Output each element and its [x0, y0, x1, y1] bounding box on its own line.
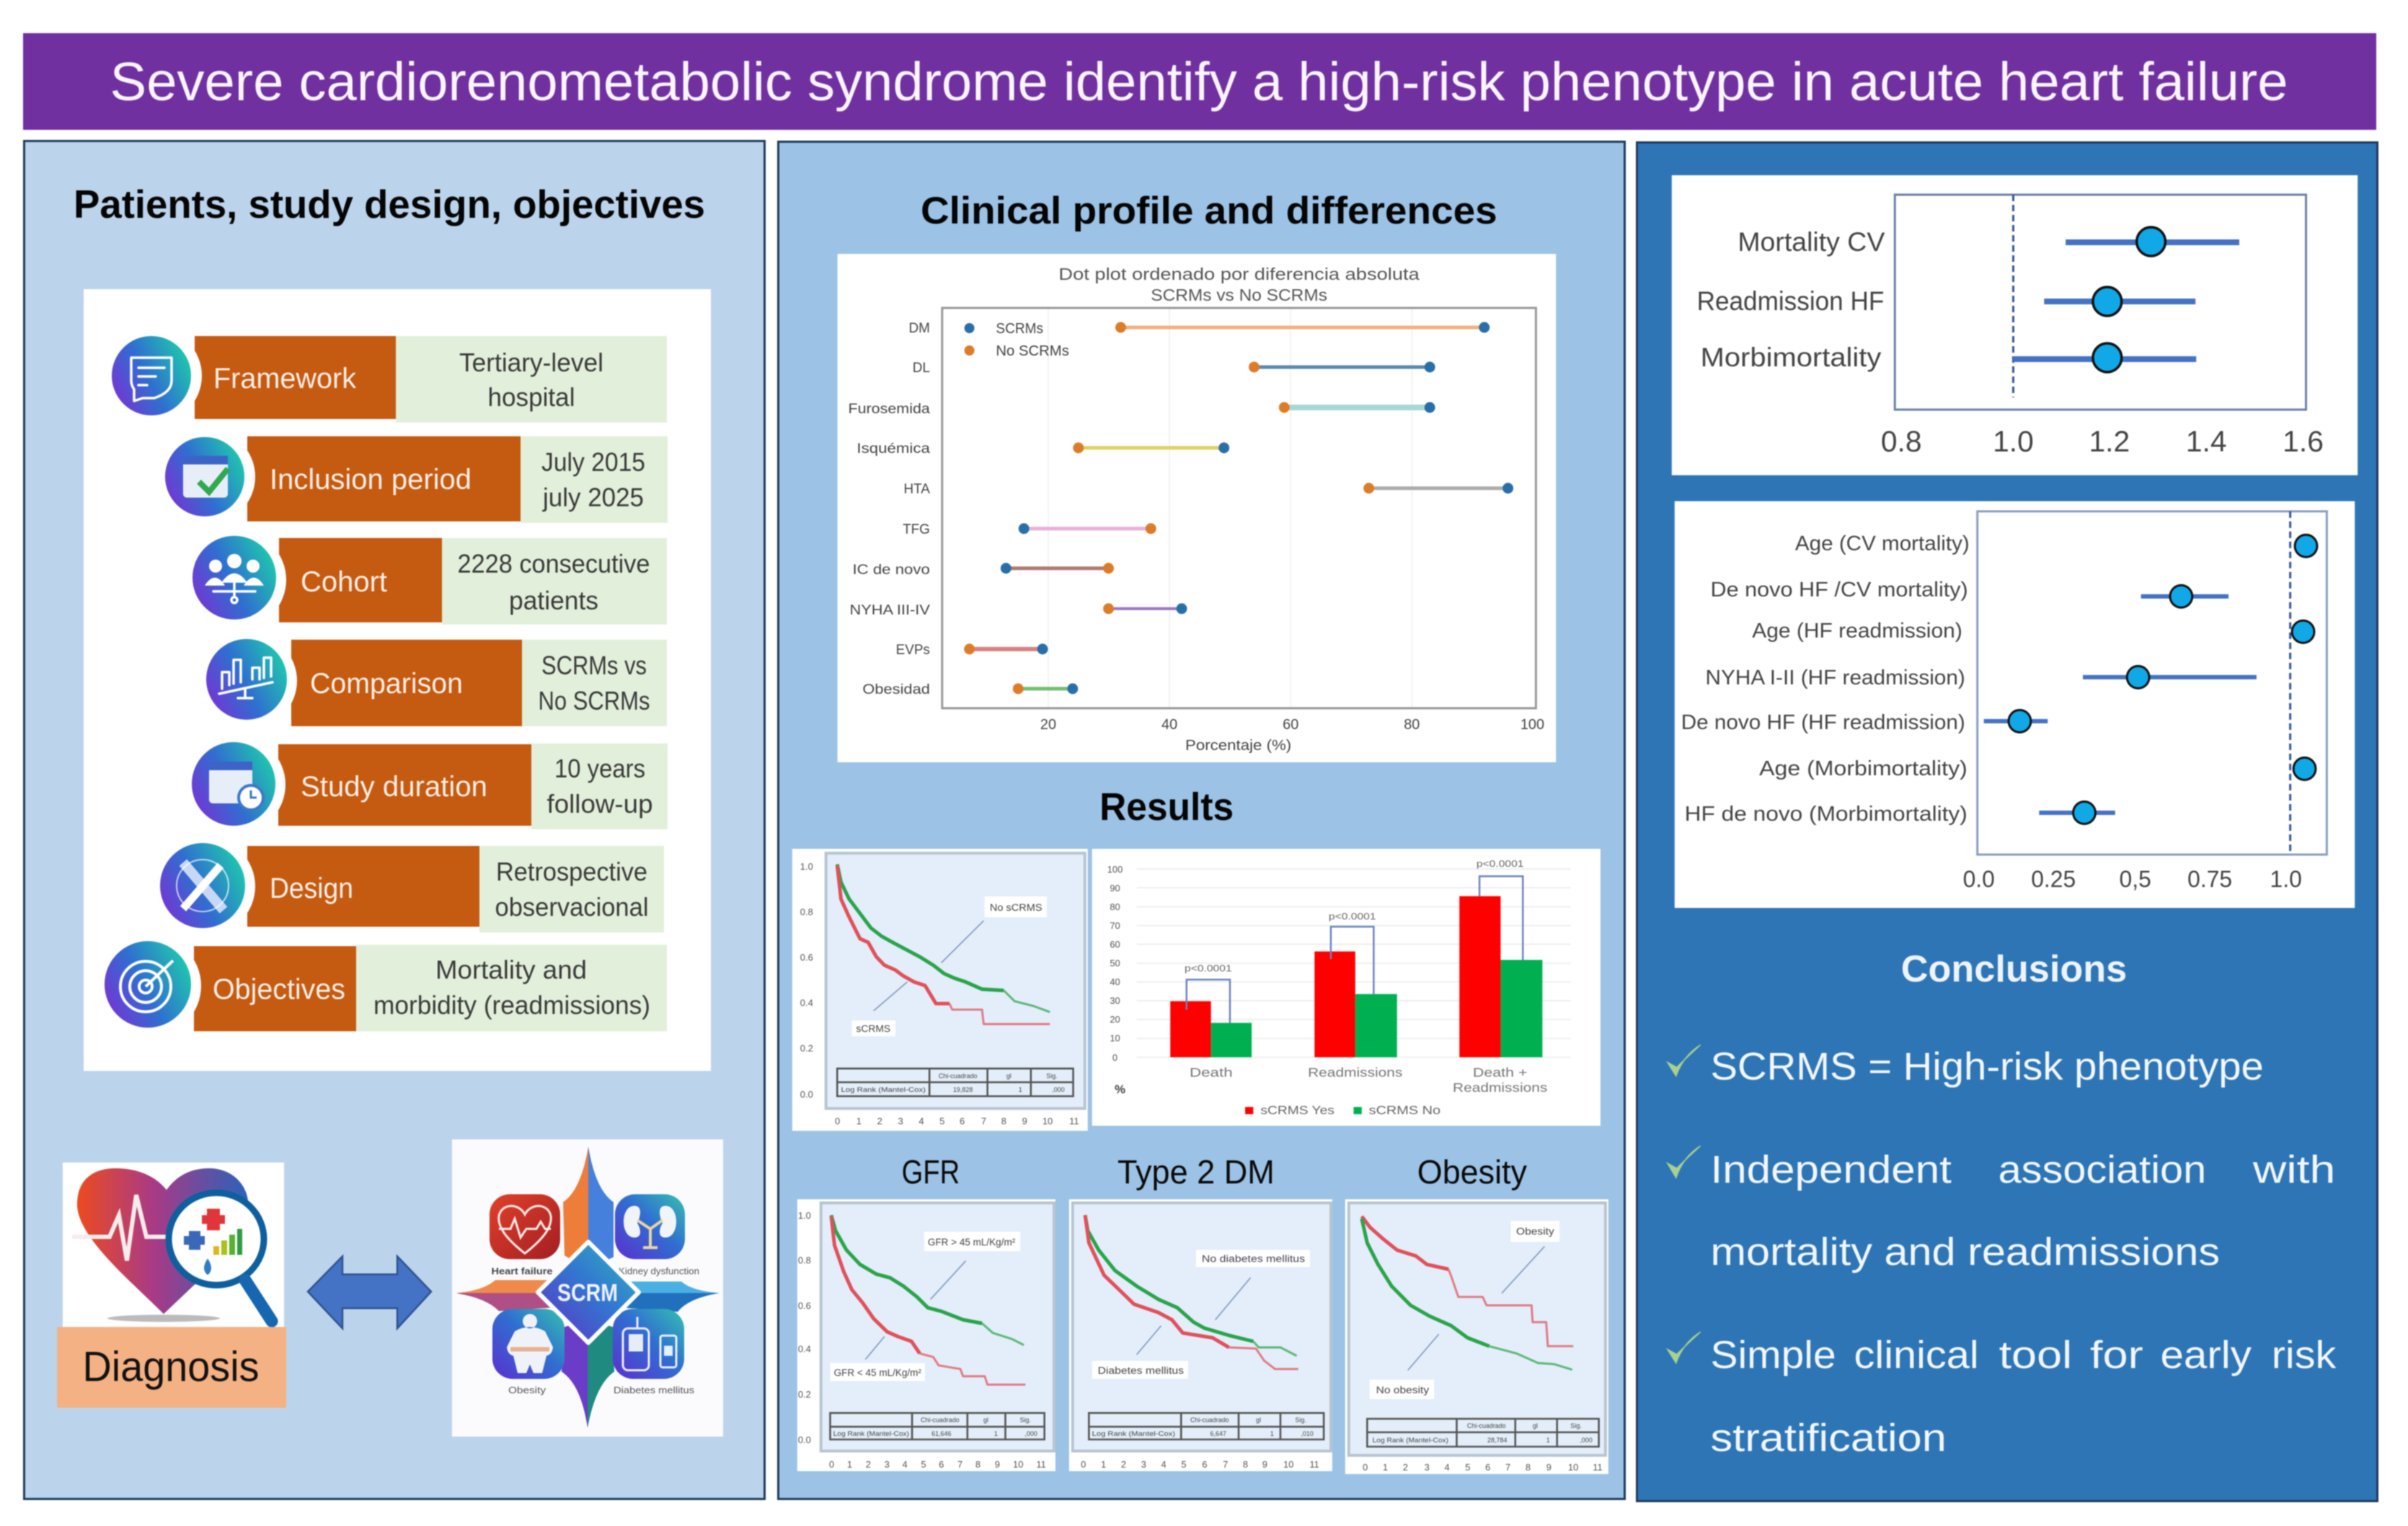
y axis labels: DM: [909, 321, 930, 336]
dot plot: Dot plot ordenado por diferencia absoluta: [1058, 265, 1420, 283]
heading: results: Results: [1099, 785, 1234, 829]
chart: Kaplan-Meier obesity: [1345, 1199, 1608, 1474]
row: mortality CV: Mortality CV: [1738, 227, 1885, 257]
row IC de novo: [1001, 563, 1114, 574]
chart: Kaplan-Meier sCRMS: [792, 849, 1088, 1131]
row: cohort: Cohort: [301, 566, 387, 598]
conclusion 2: mortality and readmissions: [1711, 1230, 2220, 1274]
x axis labels: 40: [1161, 717, 1177, 733]
chart: Kaplan-Meier sCRMS: 0.0: [800, 1089, 813, 1100]
chart: bar chart outcomes: 30: [1110, 995, 1120, 1006]
chart: Kaplan-Meier type 2 DM: 5: [1181, 1459, 1187, 1470]
x axis ticks: 1.6: [2283, 425, 2324, 458]
chart: bar chart outcomes: p<0.0001: [1185, 963, 1232, 974]
y axis labels: DL: [913, 361, 930, 376]
chart: bar chart outcomes: [1092, 849, 1601, 1126]
chart: bar chart outcomes: Death +: [1473, 1065, 1527, 1080]
chart: Kaplan-Meier type 2 DM: Diabetes mellitus: [1098, 1364, 1184, 1376]
arrow: double-headed: [308, 1256, 431, 1328]
chart: Kaplan-Meier GFR: GFR > 45 mL/Kg/m²: [928, 1236, 1016, 1248]
chart: Kaplan-Meier GFR: Chi-cuadrado: [921, 1416, 960, 1424]
row: morbimortality: Morbimortality: [1701, 343, 1882, 372]
row: cohort: [188, 531, 667, 629]
chart: Kaplan-Meier GFR: GFR < 45 mL/Kg/m²: [834, 1367, 921, 1378]
heading: clinical profile: Clinical profile and differences: [921, 190, 1497, 232]
chart: Kaplan-Meier GFR: 0.2: [798, 1389, 811, 1400]
study design card: [84, 289, 711, 1071]
chart: Kaplan-Meier sCRMS: 8: [1001, 1116, 1006, 1126]
row EVPs: [964, 643, 1048, 655]
chart: bar chart outcomes: Readmissions: [1453, 1080, 1547, 1095]
chart: Kaplan-Meier type 2 DM: Chi-cuadrado: [1190, 1416, 1229, 1424]
row: objectives: Mortality and: [435, 955, 587, 984]
row: study duration: 10 years: [554, 754, 645, 783]
row: inclusion period: July 2015: [541, 447, 645, 477]
chart: Kaplan-Meier sCRMS: 0.6: [800, 952, 813, 963]
chart: Kaplan-Meier GFR: 61,646: [931, 1430, 951, 1437]
x axis labels: Porcentaje (%): [1185, 738, 1291, 754]
panel: forest plots and conclusions: [1637, 143, 2378, 1501]
diagnosis illustration: [57, 1163, 286, 1408]
x axis ticks: 1.0: [1993, 425, 2034, 458]
chart: bar chart outcomes: 40: [1110, 976, 1120, 987]
bars: death + readmissions: [1459, 896, 1542, 1057]
y axis labels: IC de novo: [852, 563, 930, 578]
chart: Kaplan-Meier GFR: 3: [885, 1459, 890, 1470]
chart: Kaplan-Meier sCRMS: 11: [1069, 1116, 1079, 1126]
chart: bar chart outcomes: 20: [1110, 1014, 1120, 1025]
x axis ticks: 1.4: [2186, 425, 2227, 458]
chart: Kaplan-Meier obesity: 7: [1505, 1462, 1510, 1473]
chart: Kaplan-Meier type 2 DM: 2: [1121, 1459, 1126, 1470]
conclusion 3: early: [2160, 1333, 2252, 1377]
chart: Kaplan-Meier obesity: 4: [1444, 1462, 1450, 1473]
chart: Kaplan-Meier obesity: 8: [1526, 1462, 1531, 1473]
chart: Kaplan-Meier sCRMS: 0.2: [800, 1043, 813, 1054]
center panel content: [792, 190, 1608, 1474]
chart: Kaplan-Meier GFR: 0.4: [798, 1344, 811, 1354]
chart: Kaplan-Meier sCRMS: 1.0: [800, 861, 813, 872]
row labels: NYHA I-II (HF readmission): [1706, 666, 1965, 689]
x axis ticks: 0.0: [1963, 866, 1995, 892]
chart: Kaplan-Meier type 2 DM: No diabetes mellitus: [1202, 1253, 1305, 1264]
chart: bar chart outcomes: Readmissions: [1308, 1065, 1402, 1080]
row: cohort: 2228 consecutive: [457, 549, 650, 578]
chart: Kaplan-Meier type 2 DM: 7: [1223, 1459, 1228, 1470]
x axis labels: [1040, 717, 1544, 754]
chart: Kaplan-Meier type 2 DM: 0: [1081, 1459, 1086, 1470]
chart: Kaplan-Meier GFR: 8: [975, 1459, 981, 1470]
chart: Kaplan-Meier obesity: 6: [1485, 1462, 1490, 1473]
chart: Kaplan-Meier GFR: 0.8: [798, 1255, 811, 1266]
chart: Kaplan-Meier type 2 DM: ,010: [1301, 1430, 1314, 1437]
chart: Kaplan-Meier GFR: gl: [983, 1416, 988, 1424]
chart: Kaplan-Meier type 2 DM: 11: [1309, 1459, 1319, 1470]
y axis labels: HTA: [903, 482, 930, 497]
chart: bar chart outcomes: sCRMS Yes: [1260, 1103, 1334, 1117]
row: study duration: follow-up: [546, 789, 653, 819]
chart: Kaplan-Meier GFR: Sig.: [1019, 1416, 1031, 1424]
x axis ticks: 1.2: [2089, 425, 2130, 458]
chart: Kaplan-Meier obesity: 5: [1465, 1462, 1471, 1473]
row: objectives: Objectives: [213, 974, 345, 1005]
chart: bar chart outcomes: sCRMS No: [1369, 1103, 1440, 1117]
chart: Kaplan-Meier sCRMS: 6: [960, 1116, 965, 1126]
row Isquemica: [1073, 443, 1229, 453]
chart: Kaplan-Meier obesity: 9: [1546, 1462, 1552, 1473]
row: comparison: No SCRMs: [538, 686, 650, 715]
chart: Kaplan-Meier GFR: 10: [1013, 1459, 1023, 1470]
chart: Kaplan-Meier obesity: ,000: [1580, 1437, 1593, 1444]
title banner: Severe cardiorenometabolic syndrome identify a high-risk phenotype in acute heart failure: [110, 51, 2288, 112]
chart: Kaplan-Meier type 2 DM: 1: [1270, 1430, 1274, 1437]
label: diagnosis: [57, 1327, 286, 1408]
title banner: [23, 33, 2376, 130]
dot plot: SCRMs vs No SCRMs: [1151, 286, 1327, 304]
row: comparison: [202, 633, 667, 728]
conclusion 3: tool: [1999, 1333, 2072, 1377]
chart: Kaplan-Meier GFR: 2: [866, 1459, 871, 1470]
chart: Kaplan-Meier type 2 DM: gl: [1256, 1416, 1261, 1424]
chart: Kaplan-Meier type 2 DM: 6,647: [1210, 1430, 1226, 1437]
x axis labels: 20: [1040, 717, 1056, 733]
conclusion 3: risk: [2272, 1333, 2337, 1377]
x axis ticks: [1881, 425, 2324, 458]
row: framework: [107, 328, 667, 423]
conclusion 3: Simple: [1711, 1333, 1836, 1377]
chart: Kaplan-Meier obesity: 2: [1403, 1462, 1408, 1473]
row: cohort: patients: [509, 586, 598, 615]
chart: bar chart outcomes: Death: [1190, 1065, 1233, 1080]
chart: Kaplan-Meier GFR: 0.6: [798, 1300, 811, 1311]
chart: Kaplan-Meier type 2 DM: Log Rank (Mantel-Cox): [1092, 1430, 1175, 1437]
chart: Kaplan-Meier GFR: 1: [994, 1430, 998, 1437]
row: inclusion period: [160, 429, 668, 524]
legend: [965, 321, 1069, 359]
chart: Kaplan-Meier GFR: 1.0: [798, 1210, 811, 1221]
chart: bar chart outcomes: p<0.0001: [1329, 911, 1376, 922]
chart: Kaplan-Meier GFR: 5: [921, 1459, 926, 1470]
chart: Kaplan-Meier GFR: 9: [995, 1459, 1000, 1470]
chart: bar chart outcomes: 100: [1107, 864, 1123, 875]
heading: Type 2 DM: Type 2 DM: [1117, 1153, 1275, 1191]
y axis labels: Furosemida: [848, 402, 930, 417]
row: objectives: [100, 935, 667, 1036]
row: study duration: [187, 736, 668, 834]
chart: Kaplan-Meier GFR: [797, 1199, 1055, 1471]
chart: Kaplan-Meier sCRMS: 5: [939, 1116, 944, 1126]
chart: Kaplan-Meier obesity: Obesity: [1516, 1225, 1554, 1237]
legend: SCRMs: [996, 321, 1043, 337]
chart: bar chart outcomes: 0: [1112, 1052, 1117, 1063]
y axis labels: EVPs: [896, 643, 930, 658]
x axis labels: 100: [1521, 717, 1544, 733]
chart: Kaplan-Meier GFR: 6: [939, 1459, 944, 1470]
chart: Kaplan-Meier type 2 DM: 10: [1283, 1459, 1293, 1470]
chart: Kaplan-Meier GFR: 11: [1036, 1459, 1046, 1470]
chart: Kaplan-Meier sCRMS: Log Rank (Mantel-Cox): [841, 1086, 926, 1093]
chart: bar chart outcomes: %: [1115, 1082, 1125, 1096]
bars: readmissions: [1314, 951, 1397, 1057]
row: design: [157, 837, 664, 935]
tile: diabetes mellitus: Diabetes mellitus: [614, 1385, 695, 1395]
chart: Kaplan-Meier type 2 DM: 3: [1141, 1459, 1146, 1470]
row: objectives: morbidity (readmissions): [373, 990, 650, 1020]
row: inclusion period: Inclusion period: [270, 464, 472, 495]
chart: Kaplan-Meier type 2 DM: Sig.: [1295, 1416, 1306, 1424]
heading: patients: Patients, study design, objectives: [74, 182, 705, 226]
row labels: Age (HF readmission): [1752, 619, 1962, 643]
chart: bar chart outcomes: 50: [1110, 958, 1120, 969]
row: readmission HF: [1697, 286, 2195, 316]
chart: Kaplan-Meier obesity: 0: [1363, 1462, 1368, 1473]
conclusion 2: association: [1998, 1148, 2206, 1191]
SCRM illustration: [452, 1139, 723, 1437]
row: inclusion period: july 2025: [542, 482, 644, 512]
chart: Kaplan-Meier sCRMS: 9: [1022, 1116, 1027, 1126]
chart: Kaplan-Meier obesity: Log Rank (Mantel-Cox): [1373, 1437, 1448, 1444]
panel: clinical profile and results: [779, 141, 1625, 1499]
tile: diabetes mellitus: [613, 1309, 695, 1395]
y axis labels: Isquémica: [856, 441, 930, 457]
row DL: [1249, 362, 1435, 372]
x axis ticks: 0.75: [2187, 866, 2232, 892]
row: design: Retrospective: [496, 857, 647, 886]
chart: Kaplan-Meier sCRMS: Sig.: [1046, 1072, 1058, 1080]
chart: Kaplan-Meier sCRMS: gl: [1006, 1072, 1012, 1080]
chart: Kaplan-Meier type 2 DM: 8: [1243, 1459, 1248, 1470]
legend: No SCRMs: [996, 343, 1069, 359]
x axis ticks: 0.8: [1881, 425, 1922, 458]
y axis labels: [848, 321, 930, 697]
chart: Kaplan-Meier type 2 DM: 4: [1161, 1459, 1167, 1470]
conclusion 2: Independent: [1711, 1148, 1952, 1191]
y axis labels: NYHA III-IV: [849, 603, 930, 618]
row labels: [1681, 532, 1970, 826]
row HTA: [1363, 483, 1513, 493]
chart: Kaplan-Meier sCRMS: 0.8: [800, 907, 813, 917]
chart: Kaplan-Meier obesity: No obesity: [1376, 1384, 1429, 1395]
row: morbimortality: [1701, 343, 2196, 372]
chart: Kaplan-Meier type 2 DM: 6: [1202, 1459, 1207, 1470]
chart: Kaplan-Meier sCRMS: 3: [898, 1116, 903, 1126]
right panel content: [1668, 175, 2358, 1460]
tile: heart failure: [490, 1194, 560, 1276]
row: design: observacional: [495, 892, 649, 922]
dot plot: [838, 254, 1556, 762]
tile: heart failure: Heart failure: [492, 1266, 552, 1276]
chart: Kaplan-Meier GFR: 0.0: [798, 1434, 811, 1445]
conclusion 3: [1668, 1332, 2337, 1460]
bars: death: [1170, 1001, 1252, 1057]
conclusion 2: [1668, 1146, 2335, 1274]
chart: Kaplan-Meier obesity: 1: [1383, 1462, 1388, 1473]
y axis labels: Obesidad: [862, 682, 930, 697]
chart: Kaplan-Meier sCRMS: 0: [835, 1116, 840, 1126]
chart: Kaplan-Meier obesity: gl: [1533, 1422, 1538, 1429]
row: comparison: SCRMs vs: [541, 650, 647, 680]
chart: Kaplan-Meier sCRMS: 1: [1019, 1086, 1022, 1093]
chart: Kaplan-Meier sCRMS: 19,828: [953, 1086, 973, 1093]
chart: bar chart outcomes: p<0.0001: [1477, 858, 1523, 869]
chart: Kaplan-Meier sCRMS: No sCRMS: [990, 901, 1043, 913]
chart: Kaplan-Meier obesity: 1: [1546, 1437, 1550, 1444]
row NYHA: [1103, 603, 1187, 614]
chart: Kaplan-Meier GFR: 1: [847, 1459, 852, 1470]
row TFG: [1019, 524, 1156, 534]
conclusion 3: for: [2090, 1333, 2143, 1377]
chart: Kaplan-Meier obesity: 3: [1425, 1462, 1430, 1473]
chart: Kaplan-Meier sCRMS: 1: [856, 1116, 862, 1126]
center diamond: SCRM: SCRM: [557, 1279, 618, 1307]
chart: Kaplan-Meier sCRMS: 0.4: [800, 997, 813, 1008]
row labels: De novo HF /CV mortality): [1711, 578, 1968, 601]
conclusion 3: clinical: [1854, 1333, 1979, 1377]
chart: Kaplan-Meier sCRMS: 7: [981, 1116, 986, 1126]
chart: Kaplan-Meier GFR: 0: [829, 1459, 834, 1470]
chart: Kaplan-Meier type 2 DM: 1: [1101, 1459, 1106, 1470]
chart: Kaplan-Meier GFR: ,000: [1024, 1430, 1037, 1437]
forest plot: predictors: [1675, 501, 2355, 908]
chart: Kaplan-Meier GFR: Log Rank (Mantel-Cox): [833, 1430, 909, 1437]
x axis ticks: [1963, 866, 2302, 892]
row labels: Age (Morbimortality): [1759, 757, 1967, 780]
row labels: De novo HF (HF readmission): [1681, 711, 1965, 734]
chart: Kaplan-Meier type 2 DM: 9: [1262, 1459, 1267, 1470]
row DM: [1115, 322, 1489, 333]
chart: Kaplan-Meier sCRMS: sCRMS: [856, 1023, 890, 1034]
tile: obesity: Obesity: [508, 1385, 546, 1395]
center diamond: SCRM: [538, 1242, 639, 1343]
chart: bar chart outcomes: 60: [1110, 939, 1120, 950]
forest plot: adjusted outcomes: [1672, 175, 2358, 475]
chart: Kaplan-Meier sCRMS: ,000: [1052, 1086, 1065, 1093]
row: readmission HF: Readmission HF: [1697, 286, 1884, 316]
panel: patients, study design, objectives: [25, 141, 764, 1499]
x axis labels: 80: [1404, 717, 1420, 733]
chart: Kaplan-Meier sCRMS: 4: [919, 1116, 924, 1126]
row: mortality CV: [1738, 227, 2239, 257]
chart: Kaplan-Meier sCRMS: 2: [877, 1116, 882, 1126]
row: design: Design: [270, 873, 353, 904]
chart: Kaplan-Meier obesity: 10: [1568, 1462, 1578, 1473]
tile: obesity: [492, 1309, 565, 1395]
chart: bar chart outcomes: 10: [1110, 1033, 1120, 1044]
conclusion 1: SCRMS = High-risk phenotype: [1711, 1045, 2264, 1088]
tile: kidney dysfunction: Kidney dysfunction: [619, 1266, 699, 1276]
row: framework: hospital: [487, 382, 575, 412]
x axis ticks: 1.0: [2270, 866, 2302, 892]
chart: bar chart outcomes: 70: [1110, 920, 1120, 931]
chart: Kaplan-Meier type 2 DM: [1069, 1199, 1332, 1471]
label: diagnosis: Diagnosis: [82, 1344, 260, 1390]
chart: Kaplan-Meier sCRMS: Chi-cuadrado: [939, 1072, 978, 1080]
chart: Kaplan-Meier GFR: 4: [902, 1459, 908, 1470]
chart: bar chart outcomes: 90: [1110, 883, 1120, 894]
y axis labels: TFG: [903, 522, 930, 537]
heading: Obesity: Obesity: [1417, 1153, 1527, 1191]
row: study duration: Study duration: [301, 771, 487, 803]
row Obesidad: [1013, 684, 1078, 694]
conclusion 3: stratification: [1711, 1416, 1947, 1460]
heading: conclusions: Conclusions: [1901, 948, 2127, 989]
conclusion 2: with: [2252, 1148, 2335, 1191]
chart: Kaplan-Meier sCRMS: 10: [1043, 1116, 1053, 1126]
heading: GFR: GFR: [902, 1153, 960, 1191]
x axis ticks: 0.25: [2031, 866, 2076, 892]
row Furosemida: [1279, 402, 1435, 413]
chart: bar chart outcomes: 80: [1110, 901, 1120, 912]
row: comparison: Comparison: [310, 668, 463, 700]
chart: Kaplan-Meier GFR: 7: [957, 1459, 962, 1470]
chart: Kaplan-Meier obesity: 11: [1593, 1462, 1603, 1473]
chart: Kaplan-Meier obesity: Sig.: [1570, 1422, 1582, 1429]
chart: Kaplan-Meier obesity: Chi-cuadrado: [1467, 1422, 1506, 1429]
chart: Kaplan-Meier obesity: 28,784: [1487, 1437, 1507, 1444]
row labels: HF de novo (Morbimortality): [1685, 803, 1967, 826]
row labels: Age (CV mortality): [1795, 532, 1970, 555]
row: framework: Tertiary-level: [459, 348, 603, 377]
tile: kidney dysfunction: [615, 1194, 699, 1276]
x axis labels: 60: [1283, 717, 1298, 733]
x axis ticks: 0,5: [2120, 866, 2151, 892]
row: framework: Framework: [213, 363, 357, 394]
